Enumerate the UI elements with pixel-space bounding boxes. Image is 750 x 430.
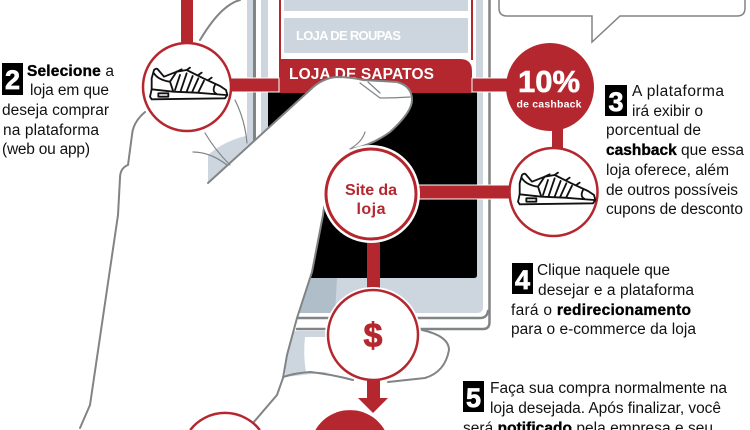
step 3 text [605,83,744,218]
icon: sneaker [518,173,595,204]
step 2 text [2,63,114,158]
step 3 text: cupons de desconto [606,201,743,218]
menu item: loja de sapatos [279,59,472,93]
step 3 text: loja oferece, além [606,162,729,179]
step 4 text: desejar e a plataforma [538,282,694,299]
menu item: top [284,0,468,11]
icon: shoe circle left [143,43,231,131]
menu item: loja de roupas: LOJA DE ROUPAS [296,28,401,43]
step 2 text: na plataforma [3,122,99,139]
cashback circle: de cashback [516,98,582,110]
step 5 text [463,380,727,430]
connector: site to dollar [367,236,380,294]
step 4 text [511,262,696,338]
step 2 text: Selecione a [27,63,114,80]
site da loja circle: loja [356,201,386,218]
bottom red circle [315,410,385,430]
phone bottom body [268,278,483,313]
bottom outline circle [190,413,260,430]
step 5 text: loja desejada. Após finalizar, você [490,400,721,417]
step 3 text: A plataforma [632,83,724,100]
step 3 text: de outros possíveis [606,182,738,199]
hand [80,0,449,430]
connector: store row to cashback [472,78,510,92]
step 3 text: porcentual de [606,122,701,139]
step 2 text: deseja comprar [2,102,109,119]
cashback circle [506,43,594,131]
speech bubble [499,0,745,42]
dollar circle [325,287,421,383]
icon: shoe circle right [510,148,598,236]
step 3 text: 3 [608,87,624,117]
phone [247,0,490,377]
menu item: loja de roupas [284,18,468,53]
dollar circle: $ [364,317,383,355]
black screen [268,90,477,278]
step 4 text: 4 [515,265,530,295]
step 5 text: Faça sua compra normalmente na [490,380,727,397]
step 2 text: loja em que [30,82,109,99]
connector: shoe to store row [229,78,279,92]
step 2 text: 2 [5,65,20,95]
step 4 text: para o e-commerce da loja [511,321,696,338]
step 3 text: cashback que essa [606,142,744,159]
arrow [358,380,388,413]
site da loja circle: Site da [345,182,397,199]
connector: cashback to shoe [552,128,563,149]
connector: site to shoe [415,185,512,199]
cashback circle: 10% [518,64,580,99]
menu item: loja de sapatos: LOJA DE SAPATOS [289,66,434,83]
step 2 text: (web ou app) [2,141,90,158]
site da loja circle [322,145,420,243]
step 4 text: fará o redirecionamento [511,302,691,319]
icon: sneaker [150,68,227,99]
connector: top vertical bar [181,0,193,44]
step 4 text: Clique naquele que [537,262,670,279]
step 3 text: irá exibir o [632,103,703,120]
step 5 text: 5 [466,383,481,413]
